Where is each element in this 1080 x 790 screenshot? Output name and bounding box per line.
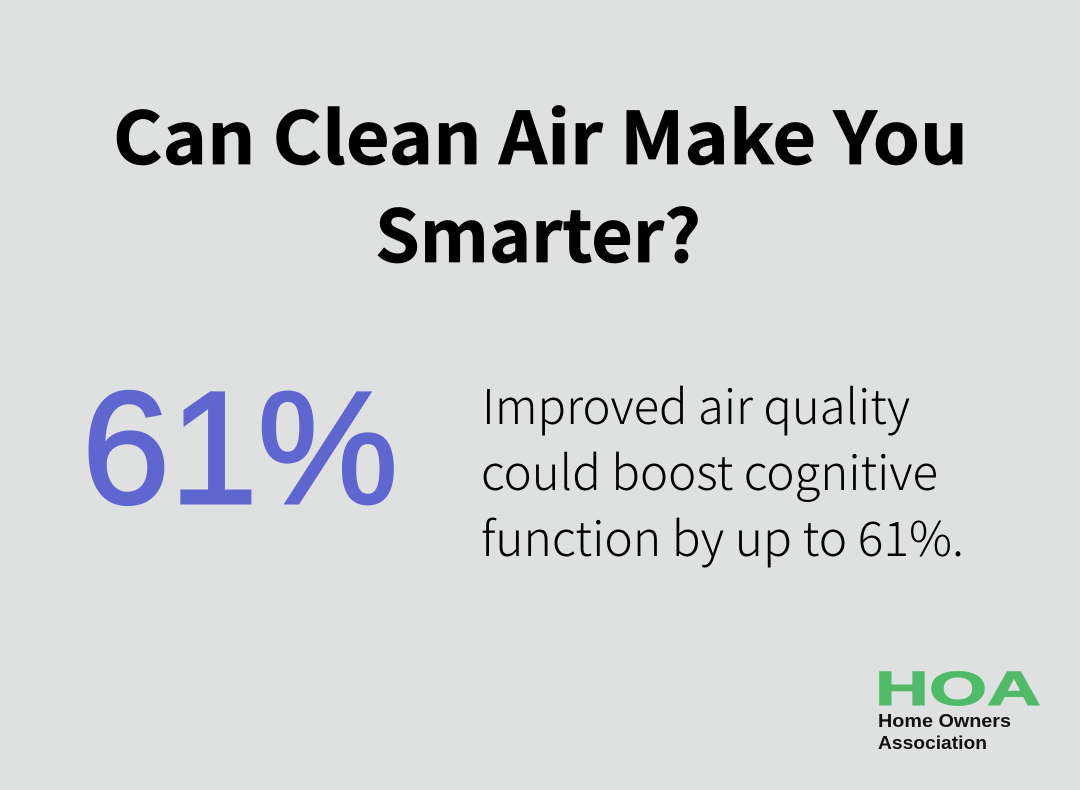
title: Can Clean Air Make You — [113, 80, 968, 185]
logo: HOA Home Owners Association: Association — [878, 733, 987, 753]
stat description: Improved air quality — [482, 368, 910, 438]
stat description: function by up to 61%. — [481, 500, 964, 570]
logo: HOA Home Owners Association — [875, 663, 1041, 753]
logo: HOA Home Owners Association: HOA — [875, 663, 1041, 716]
title: Smarter? — [375, 178, 701, 283]
title — [113, 80, 968, 283]
big stat: 61%: 61% — [82, 358, 398, 537]
stat description: could boost cognitive — [481, 434, 938, 504]
logo: HOA Home Owners Association: Home Owners — [878, 711, 1011, 731]
stat description — [481, 368, 964, 570]
